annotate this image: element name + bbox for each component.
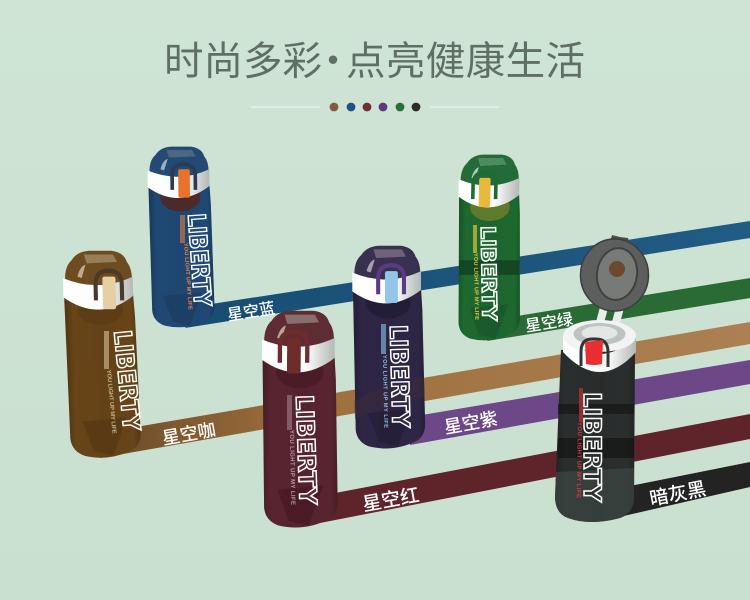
stripe: blue xyxy=(185,221,750,328)
bottle: blue: YOU LIGHT UP MY LIFE xyxy=(182,243,193,310)
stripe: dark red xyxy=(320,414,750,523)
bottle: black with open lid: LIBERTY xyxy=(578,392,606,503)
bottle: brown: YOU LIGHT UP MY LIFE xyxy=(105,370,117,434)
stripe: purple xyxy=(410,360,750,445)
bottle: purple: YOU LIGHT UP MY LIFE xyxy=(381,355,388,428)
bottle: blue xyxy=(147,147,216,327)
colour dots row with side rules xyxy=(251,103,499,111)
bottle: blue: LIBERTY xyxy=(182,212,216,308)
label: 暗灰黑: 暗灰黑 xyxy=(647,474,708,511)
bottle: brown: LIBERTY xyxy=(108,329,146,433)
bottle: dark red: YOU LIGHT UP MY LIFE xyxy=(288,430,295,505)
bottle: brown xyxy=(62,251,146,458)
title: 点亮健康生活 xyxy=(346,30,585,87)
label: 星空红: 星空红 xyxy=(360,480,421,517)
bottle: black with open lid: YOU LIGHT UP MY LIFE xyxy=(575,422,582,498)
bottle: dark red xyxy=(260,311,339,528)
label: 星空蓝: 星空蓝 xyxy=(225,294,276,326)
label: 星空绿: 星空绿 xyxy=(523,305,574,337)
stripe: black xyxy=(615,462,750,518)
open lid xyxy=(580,235,648,327)
title: 时尚多彩 xyxy=(164,30,322,87)
title xyxy=(164,30,585,87)
bottle: green: YOU LIGHT UP MY LIFE xyxy=(472,253,479,320)
bottle: purple xyxy=(352,246,425,448)
bottle: black with open lid xyxy=(555,235,648,522)
bottle: green: LIBERTY xyxy=(476,226,502,322)
label: 星空紫: 星空紫 xyxy=(442,405,500,440)
title: · xyxy=(313,30,353,87)
label: 星空咖: 星空咖 xyxy=(160,416,218,451)
bottle: purple: LIBERTY xyxy=(384,324,415,429)
bottle: dark red: LIBERTY xyxy=(290,394,322,506)
bottle: green xyxy=(455,155,524,340)
stripe: green xyxy=(487,278,750,341)
stripe: brown xyxy=(100,322,750,458)
